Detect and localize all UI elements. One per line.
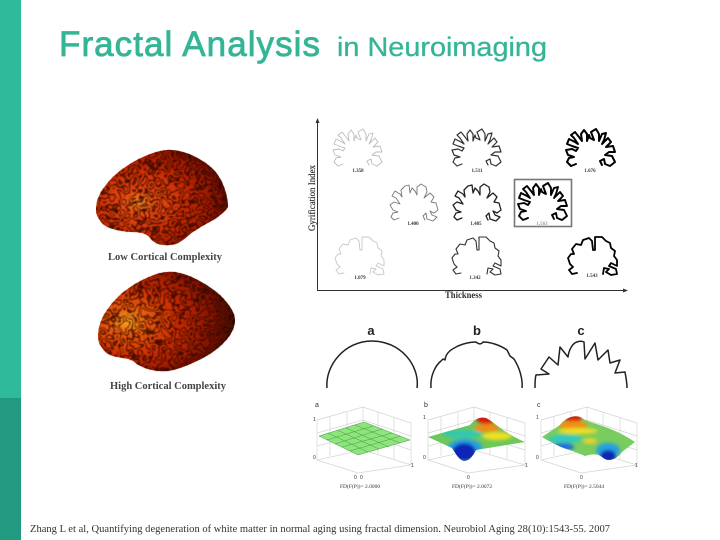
selected slice box	[514, 180, 572, 226]
plot c axis ticks: 0	[580, 475, 583, 481]
slice row 1	[333, 129, 615, 166]
panel labels a b c: a	[367, 323, 375, 338]
plot c wireframe	[541, 407, 637, 473]
plot c colour bands	[548, 414, 620, 462]
plot b wireframe	[428, 407, 525, 473]
plot a axis ticks: 0	[360, 475, 363, 481]
panel labels a b c: c	[577, 323, 585, 338]
slice values: 1.342	[469, 276, 481, 281]
chart: gyrification vs thickness	[307, 118, 628, 301]
plot c surface	[542, 416, 635, 460]
title: Fractal Analysis	[59, 25, 320, 64]
plot b colour bands	[442, 414, 512, 461]
plot b caption: FD(F(P))= 2.0072	[452, 483, 492, 490]
panel labels a b c	[367, 323, 585, 338]
slice values: 1.543	[586, 274, 598, 279]
slice values: 1.400	[407, 222, 419, 227]
plot a surface	[319, 422, 410, 455]
3D surface plots	[313, 402, 640, 490]
left sidebar	[0, 0, 21, 540]
profile curves	[327, 341, 627, 388]
brain: high cortical complexity	[98, 272, 235, 371]
plot a grid	[327, 425, 401, 452]
plot c axis ticks: 0	[536, 455, 539, 461]
plot b letter: b	[424, 402, 428, 409]
label: high cortical complexity: High Cortical Complexity	[110, 381, 226, 392]
plot c	[536, 402, 640, 490]
plot a axis ticks: 0	[313, 455, 316, 461]
plot c axis ticks: 1	[635, 463, 638, 469]
plot c caption: FD(F(P))= 2.5044	[564, 483, 604, 490]
plot b axis ticks: 0	[467, 475, 470, 481]
slice row 3	[335, 237, 617, 275]
label: low cortical complexity: Low Cortical Complexity	[108, 252, 222, 263]
plot a wireframe	[317, 407, 411, 473]
slice row 2	[390, 183, 567, 221]
x axis label: Thickness	[445, 291, 482, 301]
title: in Neuroimaging	[337, 32, 547, 62]
slice values	[352, 169, 598, 281]
plot c axis ticks: 1	[536, 415, 539, 421]
slice values: 1.485	[470, 222, 482, 227]
plot b axis ticks: 1	[525, 463, 528, 469]
curve a	[327, 341, 417, 388]
citation: Zhang L et al, Quantifying degeneration of white matter in normal aging using fractal dimension. Neurobiol Aging 28(10):1543-55. 2007	[30, 524, 610, 535]
plot c letter: c	[537, 402, 541, 409]
title	[59, 25, 547, 64]
slice values: 1.511	[472, 169, 483, 174]
plot a axis ticks: 1	[411, 463, 414, 469]
slice values: 1.079	[354, 276, 366, 281]
panel labels a b c: b	[473, 323, 481, 338]
slice values: 1.563	[536, 222, 548, 227]
plot a letter: a	[315, 402, 319, 409]
curve c	[535, 341, 627, 388]
brain: low cortical complexity	[96, 150, 228, 245]
plot a	[313, 402, 414, 490]
slice values: 1.676	[584, 169, 596, 174]
plot b axis ticks: 1	[423, 415, 426, 421]
plot b surface	[428, 418, 525, 461]
plot a caption: FD(F(P))= 2.0000	[340, 483, 380, 490]
plot a axis ticks: 1	[313, 417, 316, 423]
y axis label: Gyrification Index	[307, 165, 318, 231]
plot b	[423, 402, 530, 490]
plot a axis ticks: 0	[354, 475, 357, 481]
slice values: 1.358	[352, 169, 364, 174]
curve b	[431, 342, 522, 388]
plot b axis ticks: 0	[423, 455, 426, 461]
chart axes	[316, 118, 628, 292]
